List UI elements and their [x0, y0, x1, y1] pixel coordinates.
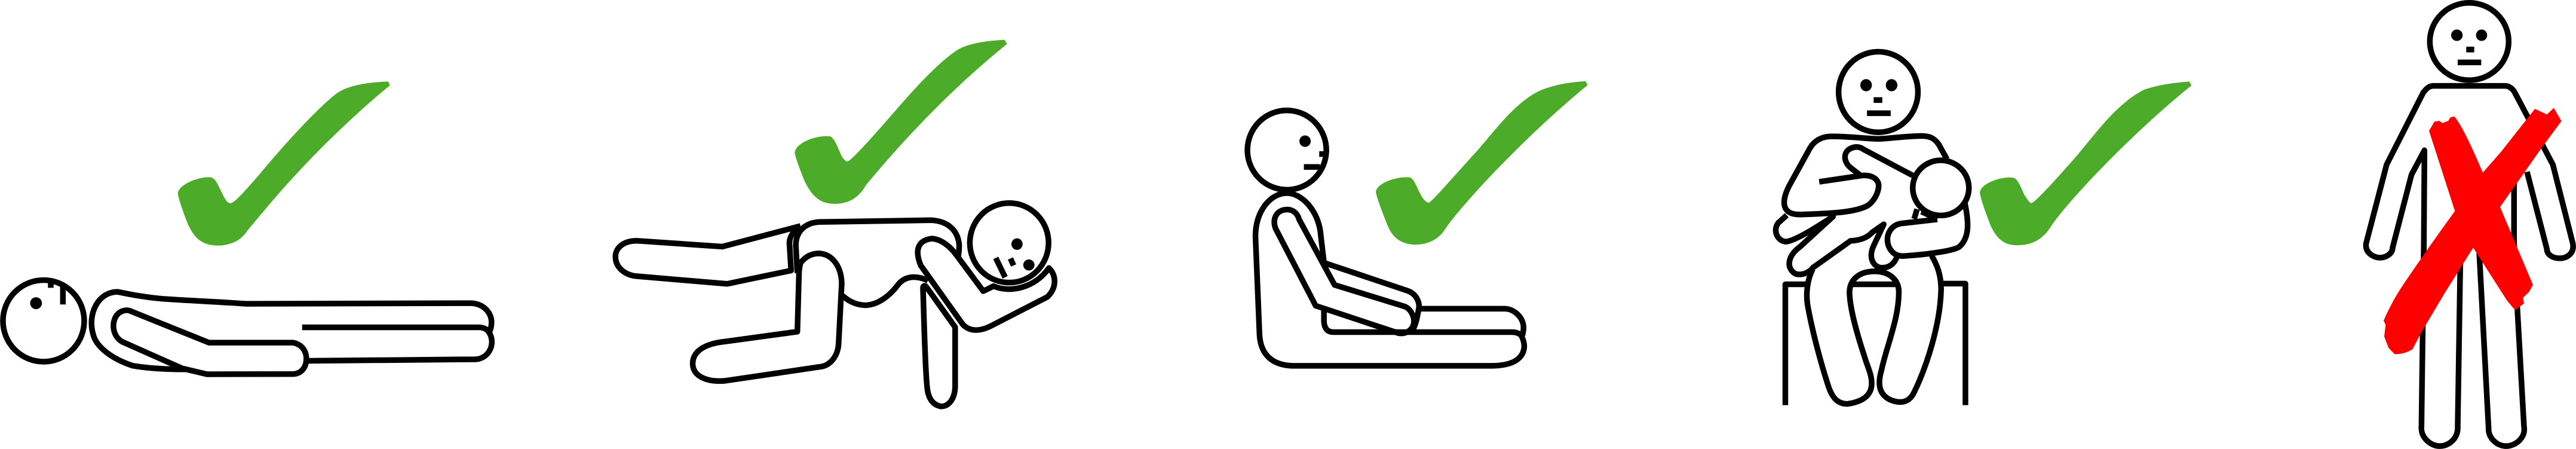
- lower leg: [302, 327, 492, 361]
- figure: seated adult with baby: [1775, 52, 1969, 405]
- head: [3, 280, 84, 362]
- far leg: [1421, 309, 1523, 335]
- head: [1247, 111, 1326, 190]
- icon: green check mark: [795, 40, 1007, 204]
- figure: reclining person: [1247, 111, 1524, 366]
- arm under head: [918, 239, 1054, 330]
- panel: person in recovery position with green check: [615, 40, 1054, 407]
- icon: green check mark: [178, 81, 390, 246]
- chair: [1785, 283, 1965, 405]
- arm: [114, 310, 306, 374]
- panel: standing person with red cross: [2366, 3, 2573, 446]
- front leg: [693, 253, 842, 381]
- head: [970, 203, 1048, 283]
- adult head: [1839, 52, 1918, 132]
- baby body and legs: [1775, 215, 1897, 274]
- head: [2430, 3, 2508, 80]
- figure: lying person: [3, 280, 492, 374]
- icon: green check mark: [1376, 81, 1587, 245]
- thigh underside: [1324, 309, 1522, 337]
- baby neck: [1914, 209, 1937, 219]
- icon: red cross mark: [2384, 108, 2562, 354]
- arm: [1274, 210, 1414, 334]
- figure: standing person: [2366, 3, 2573, 446]
- baby arm: [1845, 147, 1913, 175]
- lower arm: [923, 286, 955, 407]
- adult left arm: [1887, 203, 1968, 256]
- baby head: [1913, 160, 1969, 215]
- rear leg: [615, 226, 801, 284]
- raised thigh: [1325, 263, 1419, 331]
- panel: person lying flat on back with green check: [3, 81, 492, 374]
- adult legs: [1807, 255, 1941, 404]
- body outline: [2366, 86, 2573, 446]
- figure: person on side: [615, 203, 1054, 407]
- torso: [796, 220, 959, 273]
- panel: seated adult holding baby with green check: [1775, 52, 2192, 405]
- icon: green check mark: [1980, 81, 2192, 245]
- torso and upper leg: [91, 292, 492, 369]
- belly: [843, 277, 928, 306]
- panel: person reclining with green check: [1247, 81, 1587, 366]
- torso and right forearm: [1784, 136, 1947, 215]
- torso and lower leg: [1256, 193, 1524, 366]
